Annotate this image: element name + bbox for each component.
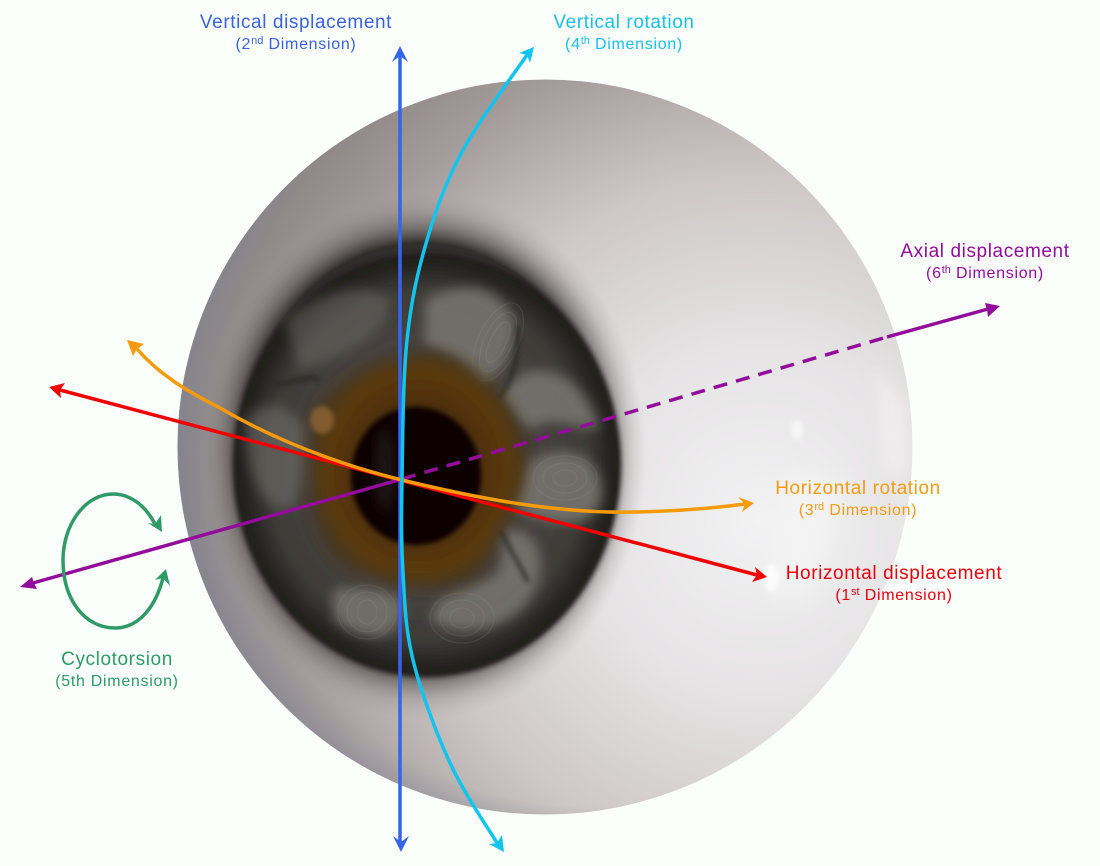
label: horizontal rotation: Dimension) (824, 502, 917, 519)
label: horizontal rotation: (3 (799, 501, 917, 519)
label: cyclotorsion: Cyclotorsion (61, 649, 173, 670)
label: horizontal displacement: (1 (835, 586, 953, 604)
iris grey fibre petals (245, 288, 602, 636)
label: vertical rotation: th (581, 35, 590, 47)
iris fine concentric fibres (338, 295, 597, 643)
iris (233, 253, 621, 677)
label: axial displacement: (6 (926, 264, 1044, 282)
axis: vertical displacement (blue) (392, 46, 409, 852)
label: horizontal displacement: Horizontal displacement (786, 563, 1002, 584)
label: horizontal displacement: st (851, 586, 860, 598)
axis: horizontal rotation (orange) (127, 340, 754, 512)
label: vertical rotation: Dimension) (590, 36, 683, 53)
axis: axial displacement (purple) (20, 303, 1000, 589)
iris brown ring (308, 351, 527, 590)
iris orange reflection (310, 406, 334, 434)
sclera (178, 80, 912, 814)
label: vertical displacement: Dimension) (263, 36, 356, 53)
sclera highlights (763, 370, 908, 600)
label: vertical displacement: Vertical displacement (200, 12, 392, 33)
label: vertical displacement: (2 (236, 35, 356, 53)
label: axial displacement: Axial displacement (900, 241, 1070, 262)
axis: vertical rotation (cyan) (402, 47, 534, 852)
label: vertical rotation: (4 (565, 35, 683, 53)
iris base (233, 253, 621, 677)
label: horizontal rotation: rd (814, 501, 824, 513)
cyclotorsion arrow (63, 494, 170, 628)
label: axial displacement: Dimension) (951, 265, 1044, 282)
pupil (351, 407, 481, 545)
sclera shadow around iris (197, 190, 647, 720)
label: vertical displacement: nd (251, 35, 263, 47)
iris dark outlines (275, 325, 528, 582)
label: axial displacement: th (942, 264, 951, 276)
label: horizontal rotation: Horizontal rotation (775, 478, 941, 499)
label: horizontal displacement: Dimension) (860, 587, 953, 604)
label: vertical rotation: Vertical rotation (553, 12, 695, 33)
axis: horizontal displacement (red) (49, 383, 767, 582)
label: cyclotorsion: (5th Dimension) (55, 673, 179, 690)
eyeball photo (178, 80, 912, 814)
